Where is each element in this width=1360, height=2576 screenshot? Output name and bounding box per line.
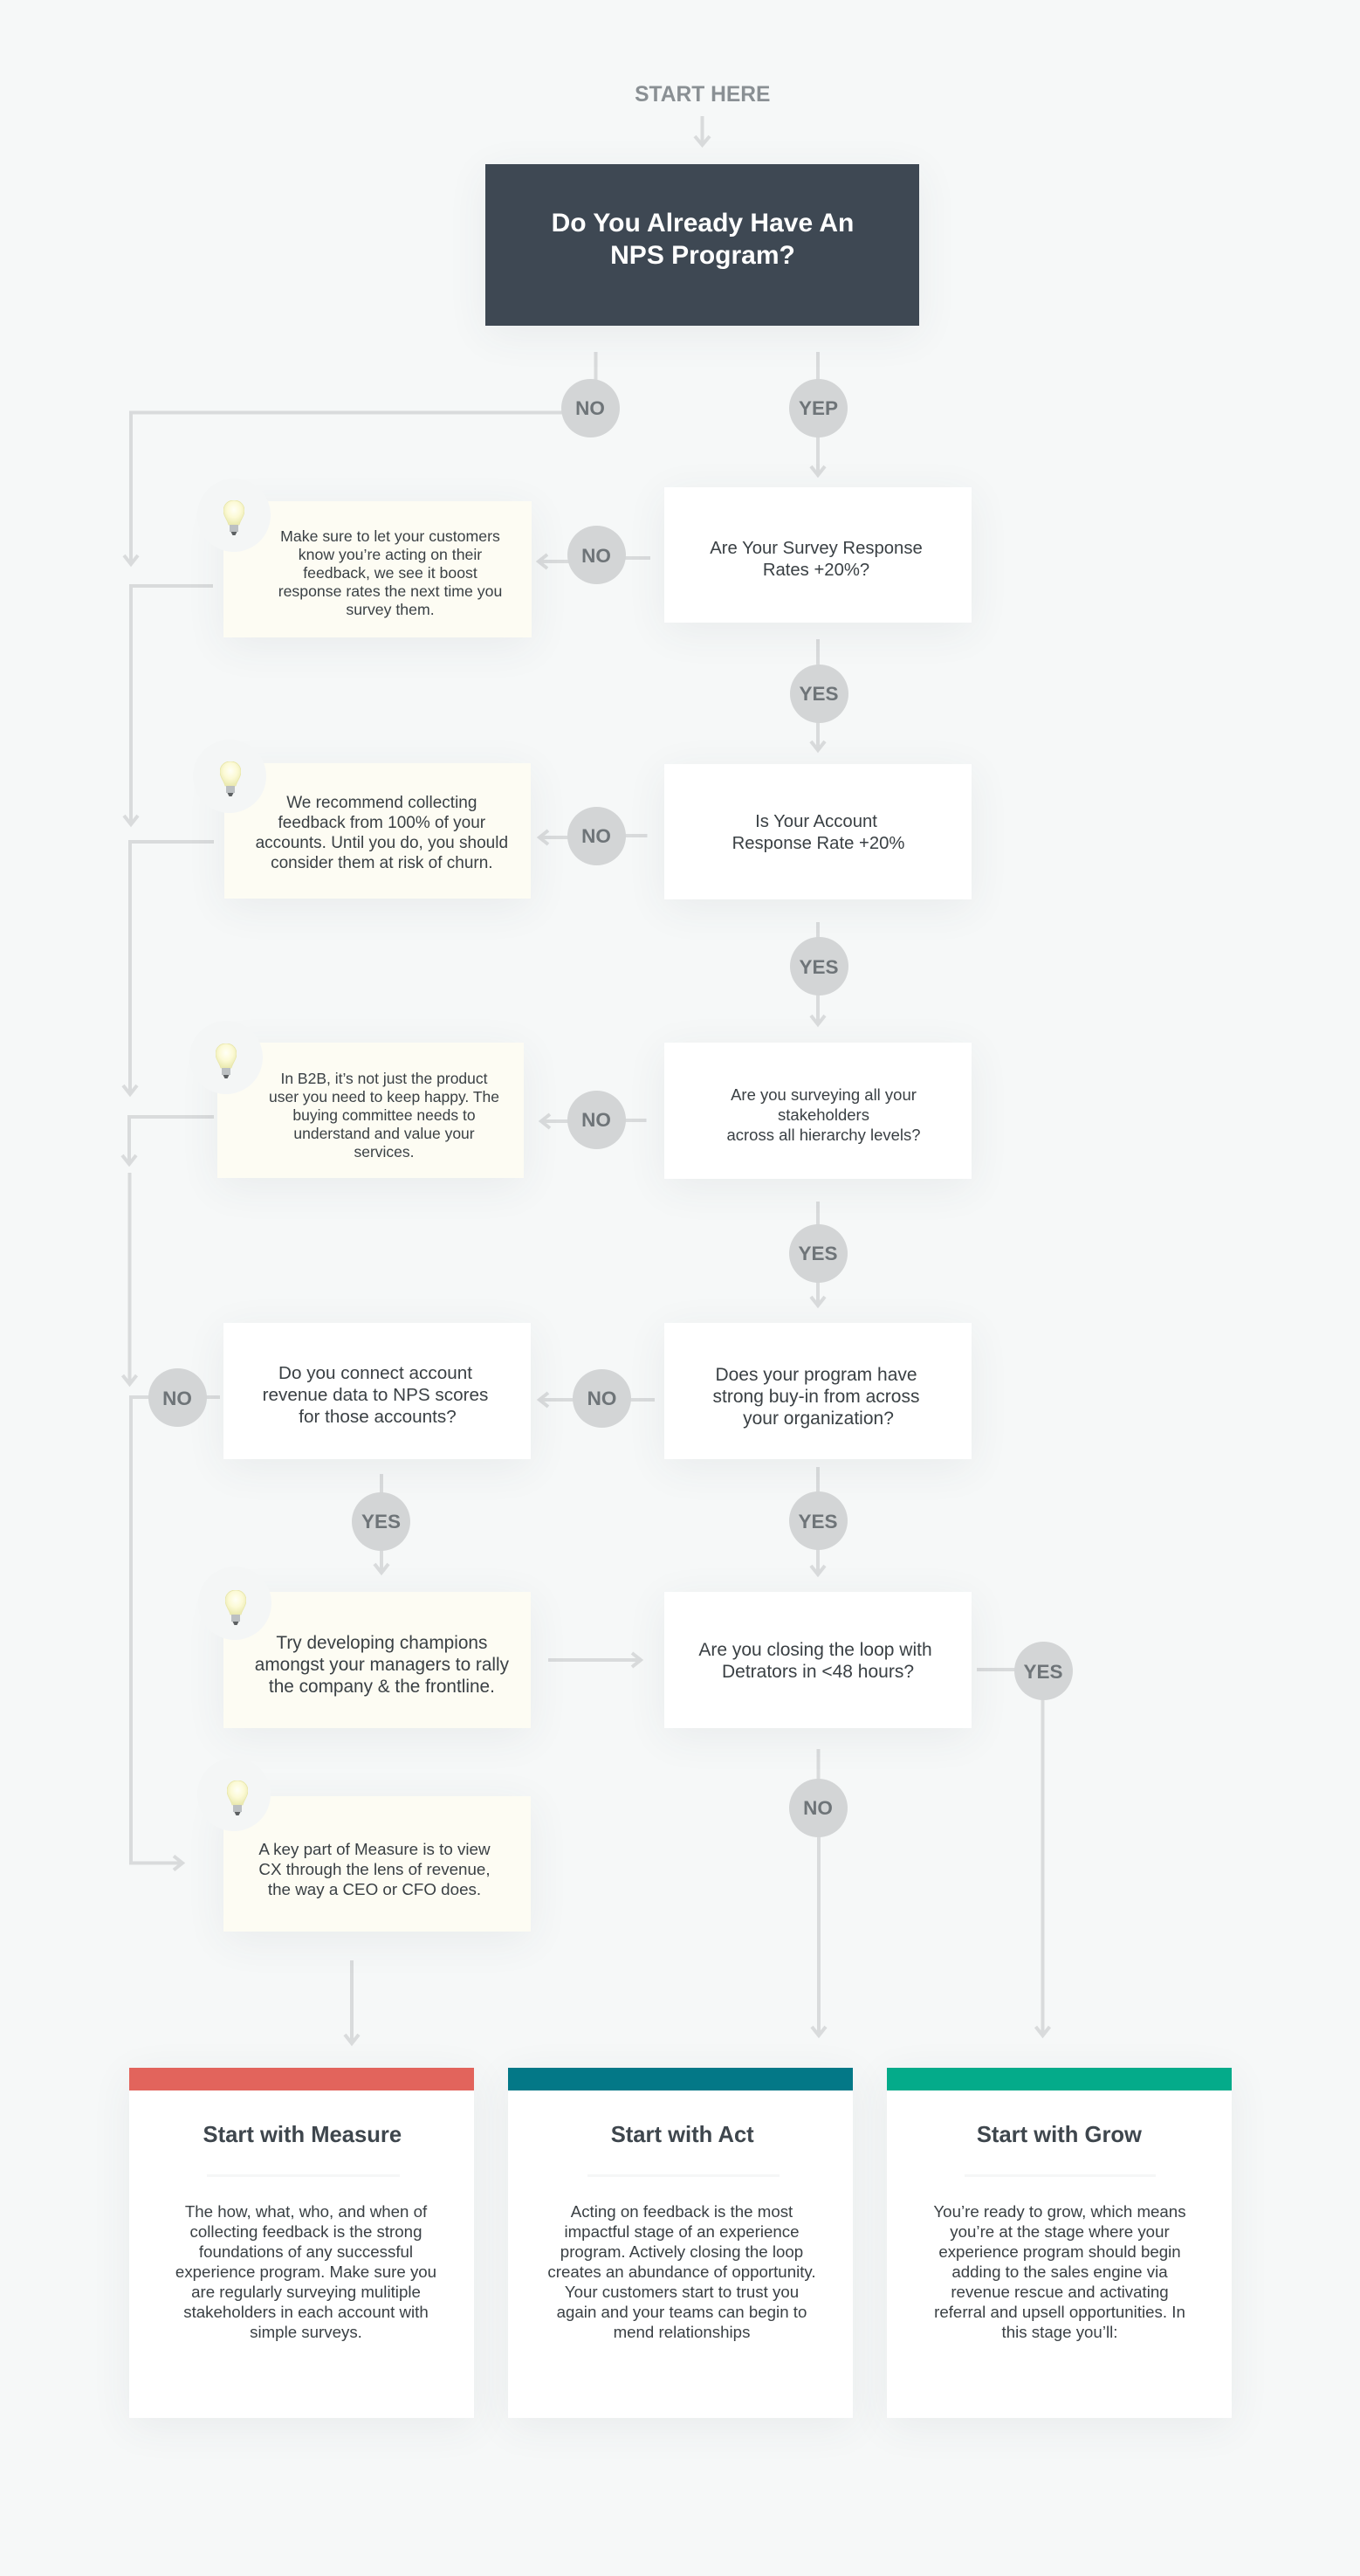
question text	[713, 1365, 919, 1429]
card body: you’re at the stage where your	[950, 2222, 1170, 2241]
tip text: A key part of Measure is to view	[258, 1840, 491, 1858]
tip text: amongst your managers to rally	[255, 1655, 509, 1675]
line: closing loop to NO	[817, 1749, 821, 1780]
node: YES 3	[789, 1224, 847, 1282]
card body: You’re ready to grow, which means	[933, 2202, 1186, 2221]
card title: Start with Grow	[977, 2123, 1142, 2147]
notch	[193, 740, 266, 813]
arrow: buy-in YES	[811, 1467, 825, 1574]
card body	[933, 2202, 1186, 2341]
icon: light bulb	[227, 1780, 248, 1815]
arrow: stakeholders YES	[811, 1202, 825, 1305]
question text: Response Rate +20%	[732, 834, 904, 853]
notch	[198, 1567, 271, 1640]
line: top question to NO	[594, 352, 597, 381]
tip text	[269, 1070, 499, 1161]
tip text: In B2B, it’s not just the product	[280, 1070, 488, 1087]
arrow: stakeholders NO to tip	[541, 1114, 646, 1128]
arrow: start to question	[695, 116, 710, 145]
node: top NO	[560, 379, 620, 437]
panel: buy-in question	[664, 1323, 972, 1459]
node: NO 2	[567, 807, 625, 864]
arrow: survey response NO to tip	[539, 554, 650, 568]
tip text: consider them at risk of churn.	[271, 854, 493, 872]
card body: creates an abundance of opportunity.	[547, 2263, 816, 2281]
tip text: know you’re acting on their	[299, 545, 482, 562]
arrow: tip 5 to Start with Measure	[345, 1960, 359, 2043]
tip text	[255, 1633, 509, 1697]
question text: revenue data to NPS scores	[263, 1385, 488, 1405]
node: YES 5	[1014, 1642, 1072, 1700]
tip text: understand and value your	[293, 1125, 475, 1142]
card body: Your customers start to trust you	[565, 2283, 799, 2301]
question text: Do you connect account	[278, 1363, 472, 1383]
question text	[732, 812, 904, 853]
tip text: user you need to keep happy. The	[269, 1088, 499, 1105]
node: YES 1	[789, 664, 848, 723]
node: NO 3	[567, 1090, 625, 1149]
panel: survey response question	[664, 487, 972, 623]
node: NO 1: NO	[581, 545, 611, 566]
card body: mend relationships	[614, 2323, 750, 2341]
question text: your organization?	[743, 1409, 894, 1429]
panel: tip 5	[223, 1796, 531, 1932]
panel: Start with Measure	[129, 2068, 474, 2418]
tip text: feedback, we see it boost	[303, 564, 477, 582]
arrow: revenue YES to tip 4	[374, 1474, 388, 1573]
card title: Start with Measure	[203, 2123, 402, 2147]
tip text: accounts. Until you do, you should	[256, 834, 508, 852]
card body: experience program. Make sure you	[175, 2263, 436, 2281]
card body	[175, 2202, 436, 2341]
icon: light bulb	[220, 761, 241, 796]
card body: revenue rescue and activating	[951, 2283, 1169, 2301]
card body	[547, 2202, 816, 2341]
tip text: the company & the frontline.	[269, 1677, 495, 1697]
tip text: feedback from 100% of your	[278, 814, 485, 832]
arrow: rail to NO junction	[122, 1173, 136, 1384]
arrow: NO to Start with Act	[812, 1835, 826, 2035]
node: YES 3: YES	[798, 1243, 838, 1264]
question text: stakeholders	[778, 1105, 869, 1123]
notch	[197, 479, 271, 552]
panel: account response question	[664, 764, 972, 899]
tip text	[278, 527, 502, 618]
icon: light bulb	[216, 1043, 237, 1078]
node: YES 4	[789, 1491, 847, 1550]
node: YES 2	[789, 937, 848, 995]
node: NO left	[148, 1368, 206, 1427]
panel: tip 3	[216, 1043, 524, 1178]
colour bar	[508, 2068, 853, 2090]
question text	[710, 539, 923, 580]
card body: are regularly surveying mulitiple	[191, 2283, 421, 2301]
panel: tip 4	[223, 1592, 531, 1728]
panel: tip 2	[224, 763, 531, 899]
node: YES under revenue	[352, 1491, 410, 1551]
tip text	[258, 1840, 491, 1898]
notch	[197, 1758, 271, 1831]
question text: Detrators in <48 hours?	[722, 1662, 914, 1682]
panel: Start with Grow	[887, 2068, 1232, 2418]
start label: START HERE	[635, 83, 770, 107]
heading: NPS Program?	[610, 241, 795, 270]
question text	[698, 1640, 932, 1682]
notch	[189, 1021, 263, 1094]
icon: light bulb	[223, 500, 244, 535]
tip text	[256, 794, 508, 872]
node: YES 2: YES	[799, 955, 839, 978]
icon: light bulb	[225, 1590, 246, 1625]
tip text: response rates the next time you	[278, 582, 502, 599]
arrow: revenue NO down rail to tip 5	[129, 1397, 220, 1870]
node: top NO: NO	[575, 397, 605, 419]
card body: experience program should begin	[938, 2242, 1181, 2261]
line: top question to YEP	[816, 352, 820, 381]
panel: tip 1	[223, 501, 532, 637]
line: closing loop to YES	[977, 1668, 1016, 1671]
card body: stakeholders in each account with	[183, 2303, 429, 2321]
question text: Rates +20%?	[763, 561, 869, 580]
arrow: account response NO to tip	[539, 830, 648, 844]
node: YES 5: YES	[1023, 1661, 1063, 1682]
card body: this stage you’ll:	[1002, 2323, 1117, 2341]
node: YES under revenue: YES	[361, 1511, 401, 1533]
card body: foundations of any successful	[199, 2242, 413, 2261]
node: YES 4: YES	[798, 1511, 838, 1532]
arrow: top NO to left rail	[124, 412, 563, 564]
heading: Do You Already Have An	[552, 209, 854, 238]
tip text: Try developing champions	[276, 1633, 487, 1653]
question text: strong buy-in from across	[713, 1387, 919, 1407]
node: NO 2: NO	[581, 825, 611, 847]
node: NO 4	[573, 1369, 631, 1427]
node: YES 1: YES	[799, 683, 839, 705]
question text: Is Your Account	[755, 812, 877, 831]
panel: Start with Act	[508, 2068, 853, 2418]
tip text: We recommend collecting	[286, 794, 477, 812]
arrow: YES to Start with Grow	[1035, 1698, 1049, 2035]
arrow: account response YES	[811, 922, 825, 1024]
node: NO 4: NO	[587, 1388, 616, 1409]
card body: Acting on feedback is the most	[571, 2202, 793, 2221]
node: YEP: YEP	[799, 397, 838, 419]
card body: referral and upsell opportunities. In	[934, 2303, 1185, 2321]
card body: The how, what, who, and when of	[185, 2202, 427, 2221]
arrow: buy-in NO to revenue question	[539, 1393, 655, 1407]
tip text: CX through the lens of revenue,	[258, 1860, 491, 1878]
question text: Are Your Survey Response	[710, 539, 923, 558]
arrow: tip 3 to left rail	[122, 1117, 214, 1164]
tip text: services.	[354, 1143, 415, 1161]
node: NO 5: NO	[803, 1797, 833, 1819]
arrow: tip 1 to left rail	[124, 586, 213, 824]
panel: closing the loop question	[664, 1592, 972, 1728]
question text: for those accounts?	[299, 1407, 457, 1427]
tip text: survey them.	[346, 601, 435, 618]
node: NO 3: NO	[581, 1109, 611, 1131]
tip text: buying committee needs to	[292, 1106, 476, 1124]
arrow: YEP to survey response question	[811, 435, 825, 475]
card body: adding to the sales engine via	[951, 2263, 1168, 2281]
node: YEP	[789, 379, 848, 437]
card body: program. Actively closing the loop	[560, 2242, 803, 2261]
question text: across all hierarchy levels?	[726, 1125, 921, 1144]
card body: simple surveys.	[250, 2323, 362, 2341]
arrow: tip 4 to closing loop question	[548, 1653, 641, 1667]
node: NO left: NO	[162, 1387, 192, 1409]
tip text: Make sure to let your customers	[280, 527, 500, 545]
card body: impactful stage of an experience	[564, 2222, 800, 2241]
card body: again and your teams can begin to	[557, 2303, 807, 2321]
panel: main question	[485, 164, 919, 326]
colour bar	[129, 2068, 474, 2090]
card body: collecting feedback is the strong	[190, 2222, 422, 2241]
panel: stakeholders question	[664, 1043, 972, 1179]
arrow: tip 2 to left rail	[123, 842, 214, 1094]
panel: revenue question	[223, 1323, 531, 1459]
colour bar	[887, 2068, 1232, 2090]
question text	[726, 1085, 921, 1144]
question text: Does your program have	[715, 1365, 917, 1385]
tip text: the way a CEO or CFO does.	[268, 1880, 481, 1898]
question text: Are you surveying all your	[731, 1085, 917, 1104]
question text: Are you closing the loop with	[698, 1640, 932, 1660]
arrow: survey response YES	[811, 639, 825, 750]
question text	[263, 1363, 488, 1427]
node: NO 1	[567, 526, 625, 584]
node: NO 5	[789, 1778, 847, 1837]
card title: Start with Act	[611, 2123, 754, 2147]
heading	[552, 209, 854, 270]
